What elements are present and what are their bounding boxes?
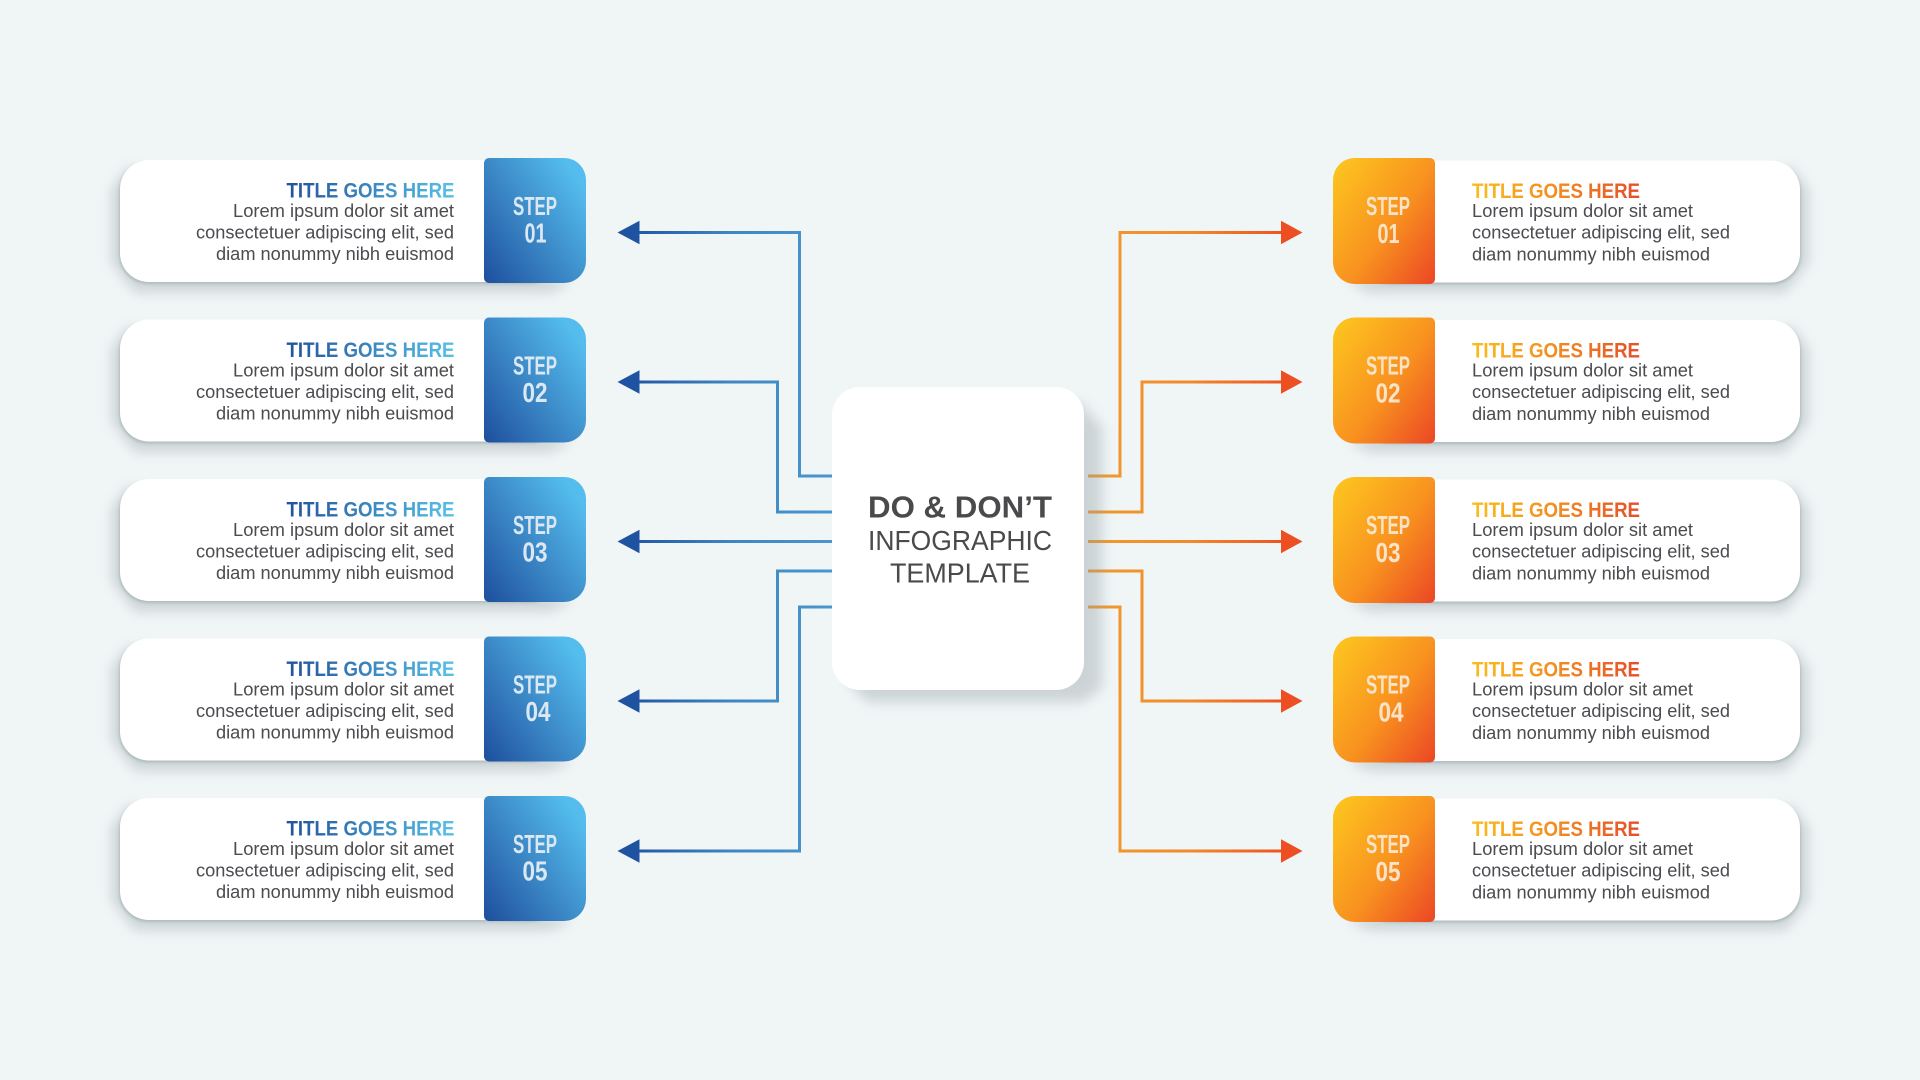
badge label: STEP [1366, 352, 1410, 380]
body text: diam nonummy nibh euismod [1472, 562, 1710, 583]
panel: left connector lines [636, 232, 832, 851]
body text [196, 838, 454, 902]
center title: INFOGRAPHIC [868, 525, 1052, 556]
badge label: 01 [524, 218, 546, 248]
body text: consectetuer adipiscing elit, sed [1472, 541, 1730, 562]
body text: diam nonummy nibh euismod [216, 402, 454, 424]
badge label: 04 [526, 696, 551, 727]
card body [120, 479, 560, 601]
card body [120, 320, 560, 442]
panel: right connector lines [1088, 232, 1284, 851]
panel: center card [832, 387, 1102, 702]
panel: right step 03 [1333, 477, 1808, 611]
panel: left step 01 [112, 158, 586, 292]
badge label: STEP [1366, 831, 1410, 859]
center title [868, 490, 1052, 588]
title: TITLE GOES HERE [1472, 499, 1640, 522]
title: TITLE GOES HERE [1472, 180, 1640, 203]
body text: diam nonummy nibh euismod [216, 881, 454, 902]
card edge shadow [119, 640, 559, 762]
badge label [1366, 512, 1410, 568]
badge label: 03 [1376, 537, 1400, 568]
badge [1333, 477, 1435, 603]
arrowheads: left [618, 221, 640, 863]
badge label [513, 512, 557, 568]
panel: right step 05 [1333, 796, 1808, 930]
badge label [513, 672, 557, 727]
title: TITLE GOES HERE [286, 818, 454, 840]
center title: DO & DON’T [868, 490, 1052, 524]
card edge shadow [119, 322, 559, 444]
card edge shadow [119, 162, 559, 284]
center card shadow [848, 400, 1102, 702]
body text: Lorem ipsum dolor sit amet [233, 838, 454, 859]
badge label [1366, 352, 1410, 408]
badge label [513, 352, 557, 408]
card shadow [1348, 328, 1808, 452]
body text [196, 678, 454, 742]
card shadow [1348, 806, 1808, 930]
body text: consectetuer adipiscing elit, sed [196, 222, 454, 243]
card edge shadow [119, 800, 559, 922]
badge label: 04 [1378, 696, 1404, 728]
badge [1333, 796, 1435, 922]
body text: consectetuer adipiscing elit, sed [196, 860, 454, 881]
body text: Lorem ipsum dolor sit amet [1472, 519, 1693, 540]
badge label [1366, 831, 1410, 887]
badge label [513, 193, 557, 248]
panel: left step 03 [112, 477, 586, 611]
card shadow [112, 168, 572, 292]
card body [1360, 480, 1800, 602]
title: TITLE GOES HERE [1472, 658, 1640, 682]
badge [1333, 636, 1435, 762]
badge label: STEP [513, 672, 557, 700]
body text [196, 360, 454, 424]
badge label: 05 [1376, 856, 1400, 887]
panel: right step 04 [1333, 636, 1808, 770]
card shadow [1348, 646, 1808, 770]
title: TITLE GOES HERE [286, 180, 454, 202]
body text [1472, 678, 1730, 743]
body text: diam nonummy nibh euismod [1472, 881, 1710, 902]
body text: Lorem ipsum dolor sit amet [1472, 838, 1693, 859]
card edge shadow [119, 481, 559, 603]
card body [120, 798, 560, 920]
center title: TEMPLATE [890, 558, 1030, 588]
body text: diam nonummy nibh euismod [216, 722, 454, 742]
body text: consectetuer adipiscing elit, sed [1472, 222, 1730, 243]
body text: consectetuer adipiscing elit, sed [1472, 700, 1730, 721]
panel: left step 04 [112, 636, 586, 770]
card shadow [112, 806, 572, 930]
card shadow [1348, 487, 1808, 611]
body text: diam nonummy nibh euismod [1472, 403, 1710, 424]
card edge shadow [1361, 482, 1801, 604]
title: TITLE GOES HERE [1472, 340, 1640, 362]
body text [196, 200, 454, 264]
badge label [1366, 193, 1410, 249]
body text: Lorem ipsum dolor sit amet [233, 519, 454, 540]
card body [1360, 160, 1800, 282]
badge label: 01 [1378, 218, 1400, 249]
badge label: 02 [522, 377, 548, 408]
card body [1360, 798, 1800, 920]
panel: left step 02 [112, 318, 586, 452]
card edge shadow [1361, 800, 1801, 922]
badge [484, 158, 586, 283]
body text: Lorem ipsum dolor sit amet [1472, 678, 1693, 700]
body text: consectetuer adipiscing elit, sed [1472, 860, 1730, 881]
body text [1472, 360, 1730, 424]
badge [484, 318, 586, 442]
badge label: 03 [522, 536, 548, 568]
body text: consectetuer adipiscing elit, sed [1472, 381, 1730, 402]
card edge shadow [1361, 641, 1801, 763]
card body [1360, 320, 1800, 442]
badge label [1366, 672, 1410, 728]
card body [120, 160, 560, 282]
arrowheads: right [1281, 221, 1302, 863]
badge label: STEP [513, 512, 557, 540]
card shadow [1348, 168, 1808, 292]
body text: diam nonummy nibh euismod [1472, 722, 1710, 743]
title: TITLE GOES HERE [286, 658, 454, 681]
body text: consectetuer adipiscing elit, sed [196, 541, 454, 562]
body text: Lorem ipsum dolor sit amet [1472, 360, 1693, 380]
badge label: STEP [513, 831, 557, 859]
body text: Lorem ipsum dolor sit amet [233, 678, 454, 700]
body text [1472, 838, 1730, 902]
badge label: STEP [513, 352, 557, 380]
badge [484, 477, 586, 602]
body text [1472, 519, 1730, 583]
body text [1472, 200, 1730, 264]
title: TITLE GOES HERE [286, 339, 454, 362]
card shadow [112, 328, 572, 452]
body text: Lorem ipsum dolor sit amet [233, 200, 454, 221]
title: TITLE GOES HERE [1472, 818, 1640, 841]
badge label: STEP [513, 193, 557, 221]
badge [484, 796, 586, 921]
panel: right step 02 [1333, 318, 1808, 452]
card body [120, 638, 560, 760]
body text: diam nonummy nibh euismod [216, 562, 454, 583]
badge label: STEP [1366, 672, 1410, 700]
body text: diam nonummy nibh euismod [1472, 243, 1710, 264]
badge [484, 636, 586, 762]
badge [1333, 318, 1435, 444]
body text: consectetuer adipiscing elit, sed [196, 381, 454, 402]
badge label: STEP [1366, 512, 1410, 540]
card shadow [112, 487, 572, 611]
badge label: STEP [1366, 193, 1410, 221]
badge [1333, 158, 1435, 284]
badge label [513, 831, 557, 886]
card shadow [112, 646, 572, 770]
body text: Lorem ipsum dolor sit amet [1472, 200, 1693, 221]
badge label: 02 [1376, 378, 1400, 408]
badge label: 05 [522, 856, 548, 886]
card body [1360, 639, 1800, 761]
body text: Lorem ipsum dolor sit amet [233, 360, 454, 380]
center card body [832, 387, 1084, 690]
title: TITLE GOES HERE [286, 498, 454, 522]
card edge shadow [1361, 162, 1801, 284]
card edge shadow [1361, 322, 1801, 444]
panel: right step 01 [1333, 158, 1808, 292]
body text [196, 519, 454, 583]
panel: left step 05 [112, 796, 586, 930]
body text: consectetuer adipiscing elit, sed [196, 700, 454, 721]
body text: diam nonummy nibh euismod [216, 243, 454, 264]
